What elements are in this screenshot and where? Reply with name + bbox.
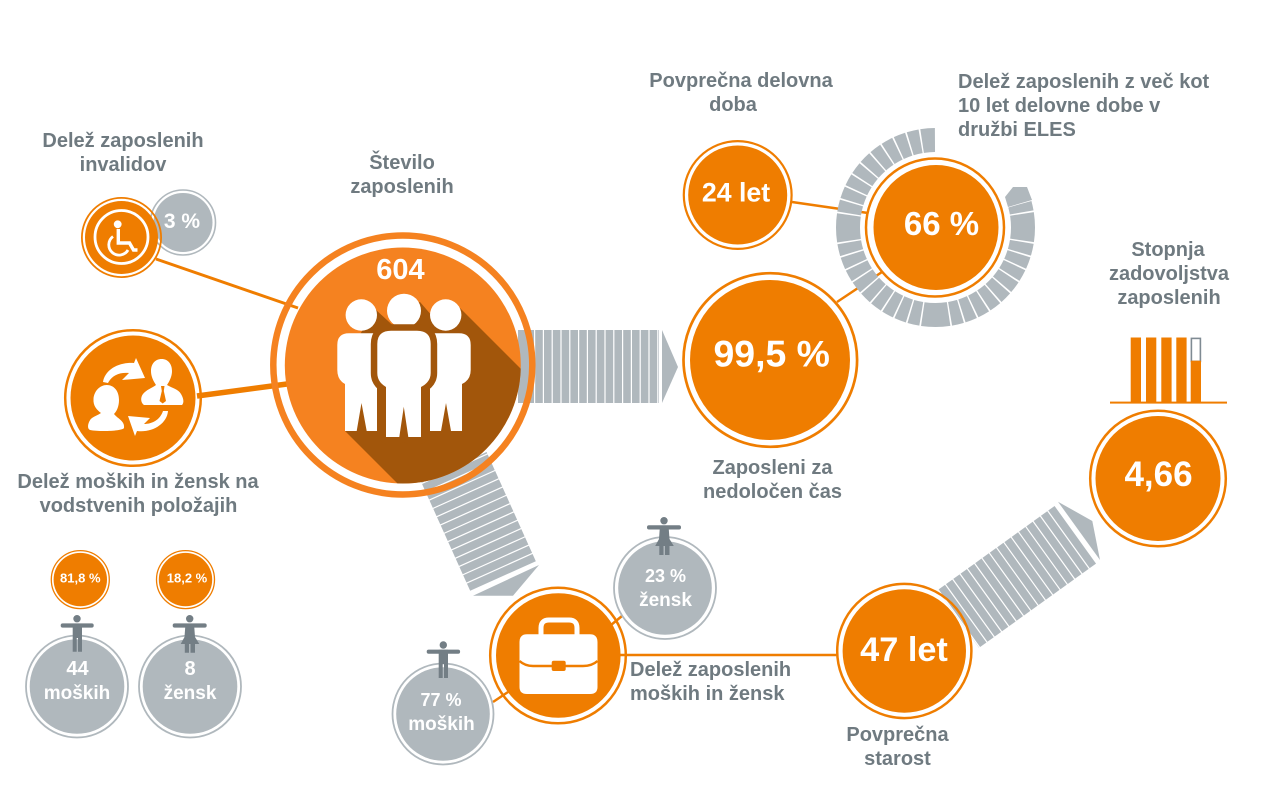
label: share of men and women: Delež zaposlenih [630, 659, 791, 681]
icon: briefcase circle [490, 588, 626, 723]
icon: wheelchair circle [82, 198, 161, 277]
label: average age: starost [864, 748, 931, 770]
label: average years of service [649, 70, 834, 116]
icon: female figure (23 %) [647, 517, 681, 555]
label: satisfaction: zadovoljstva [1109, 263, 1230, 285]
icon: female figure (8) [173, 615, 207, 653]
orange badge: 81,8 %: 81,8 % [60, 570, 101, 586]
tie [160, 386, 166, 404]
label: satisfaction: Stopnja [1131, 239, 1206, 261]
icon: group of people [337, 294, 471, 437]
label: average years of service: Povprečna delovna [649, 70, 834, 92]
label: permanent employment [703, 457, 842, 503]
orange badge: 18,2 % [156, 551, 214, 609]
label: number of employees: zaposlenih [350, 176, 454, 198]
circle: 4,66 [1090, 411, 1226, 546]
grey circle: 77 % moških: moških [408, 714, 475, 735]
label: disabled employees [42, 130, 204, 176]
label: men and women in management: vodstvenih položajih [40, 495, 237, 517]
arrow: striped right to 99,5 % [518, 330, 678, 403]
swap arrows [103, 358, 145, 383]
label: satisfaction [1109, 239, 1230, 309]
ring chart: segmented arc around 66 % [836, 128, 1035, 327]
label: average years of service: doba [709, 94, 758, 116]
grey circle: 23 % žensk [614, 537, 716, 639]
grey circle: 44 moških [26, 636, 128, 738]
label: average age [846, 724, 950, 770]
circle: 66 % [866, 158, 1004, 296]
label: share with 10+ years [958, 71, 1210, 141]
bar icon: satisfaction rating [1110, 338, 1227, 404]
circle: 99,5 % [684, 273, 857, 447]
grey circle: 77 % moških: 77 % [420, 690, 462, 710]
circle: 99,5 %: 99,5 % [713, 332, 830, 374]
circle: 47 let: 47 let [860, 631, 948, 669]
label: share of men and women: moških in žensk [630, 683, 785, 705]
circle: 4,66: 4,66 [1124, 455, 1193, 494]
arrow: striped diagonal down to briefcase [454, 467, 539, 596]
grey circle: 44 moških: moških [44, 683, 110, 704]
icon: gender swap circle [65, 330, 201, 466]
main circle: number of employees [270, 232, 536, 498]
grey circle: 23 % žensk: žensk [639, 590, 692, 611]
value: 604: 604 [376, 254, 425, 286]
circle: 3 %: 3 % [164, 210, 200, 233]
circle: 24 let [684, 141, 792, 249]
label: share with 10+ years: 10 let delovne dobe v [958, 95, 1161, 117]
icon: male figure (44) [61, 615, 94, 652]
woman [88, 385, 124, 431]
arrow: striped diagonal up to 4,66 [958, 502, 1100, 619]
label: number of employees [350, 150, 454, 198]
label: disabled employees: invalidov [80, 154, 167, 176]
label: number of employees: Število [369, 150, 435, 174]
circle: 47 let [837, 584, 971, 718]
grey circle: 8 žensk: 8 [184, 658, 196, 680]
circle: 66 %: 66 % [904, 205, 979, 242]
grey circle: 44 moških: 44 [66, 658, 89, 680]
label: men and women in management: Delež moških in žensk na [17, 471, 259, 493]
icon: male figure (77 %) [427, 641, 460, 678]
label: share with 10+ years: Delež zaposlenih z več kot [958, 71, 1210, 93]
long shadow [345, 302, 521, 484]
circle: 3 % [150, 190, 216, 255]
grey circle: 8 žensk [139, 636, 241, 738]
label: permanent employment: Zaposleni za [712, 457, 833, 479]
grey circle: 23 % žensk: 23 % [645, 566, 686, 586]
label: satisfaction: zaposlenih [1117, 287, 1221, 309]
circle: 24 let: 24 let [702, 178, 770, 208]
connector lines [156, 202, 882, 702]
label: men and women in management [17, 471, 259, 517]
label: average age: Povprečna [846, 724, 950, 746]
label: disabled employees: Delež zaposlenih [42, 130, 204, 152]
orange badge: 81,8 % [51, 551, 109, 609]
grey circle: 8 žensk: žensk [164, 683, 217, 704]
orange badge: 18,2 %: 18,2 % [167, 570, 208, 586]
label: share with 10+ years: družbi ELES [958, 119, 1076, 141]
grey circle: 77 % moških [392, 664, 494, 764]
label: permanent employment: nedoločen čas [703, 481, 842, 503]
label: share of men and women [630, 659, 791, 705]
man [141, 359, 183, 405]
